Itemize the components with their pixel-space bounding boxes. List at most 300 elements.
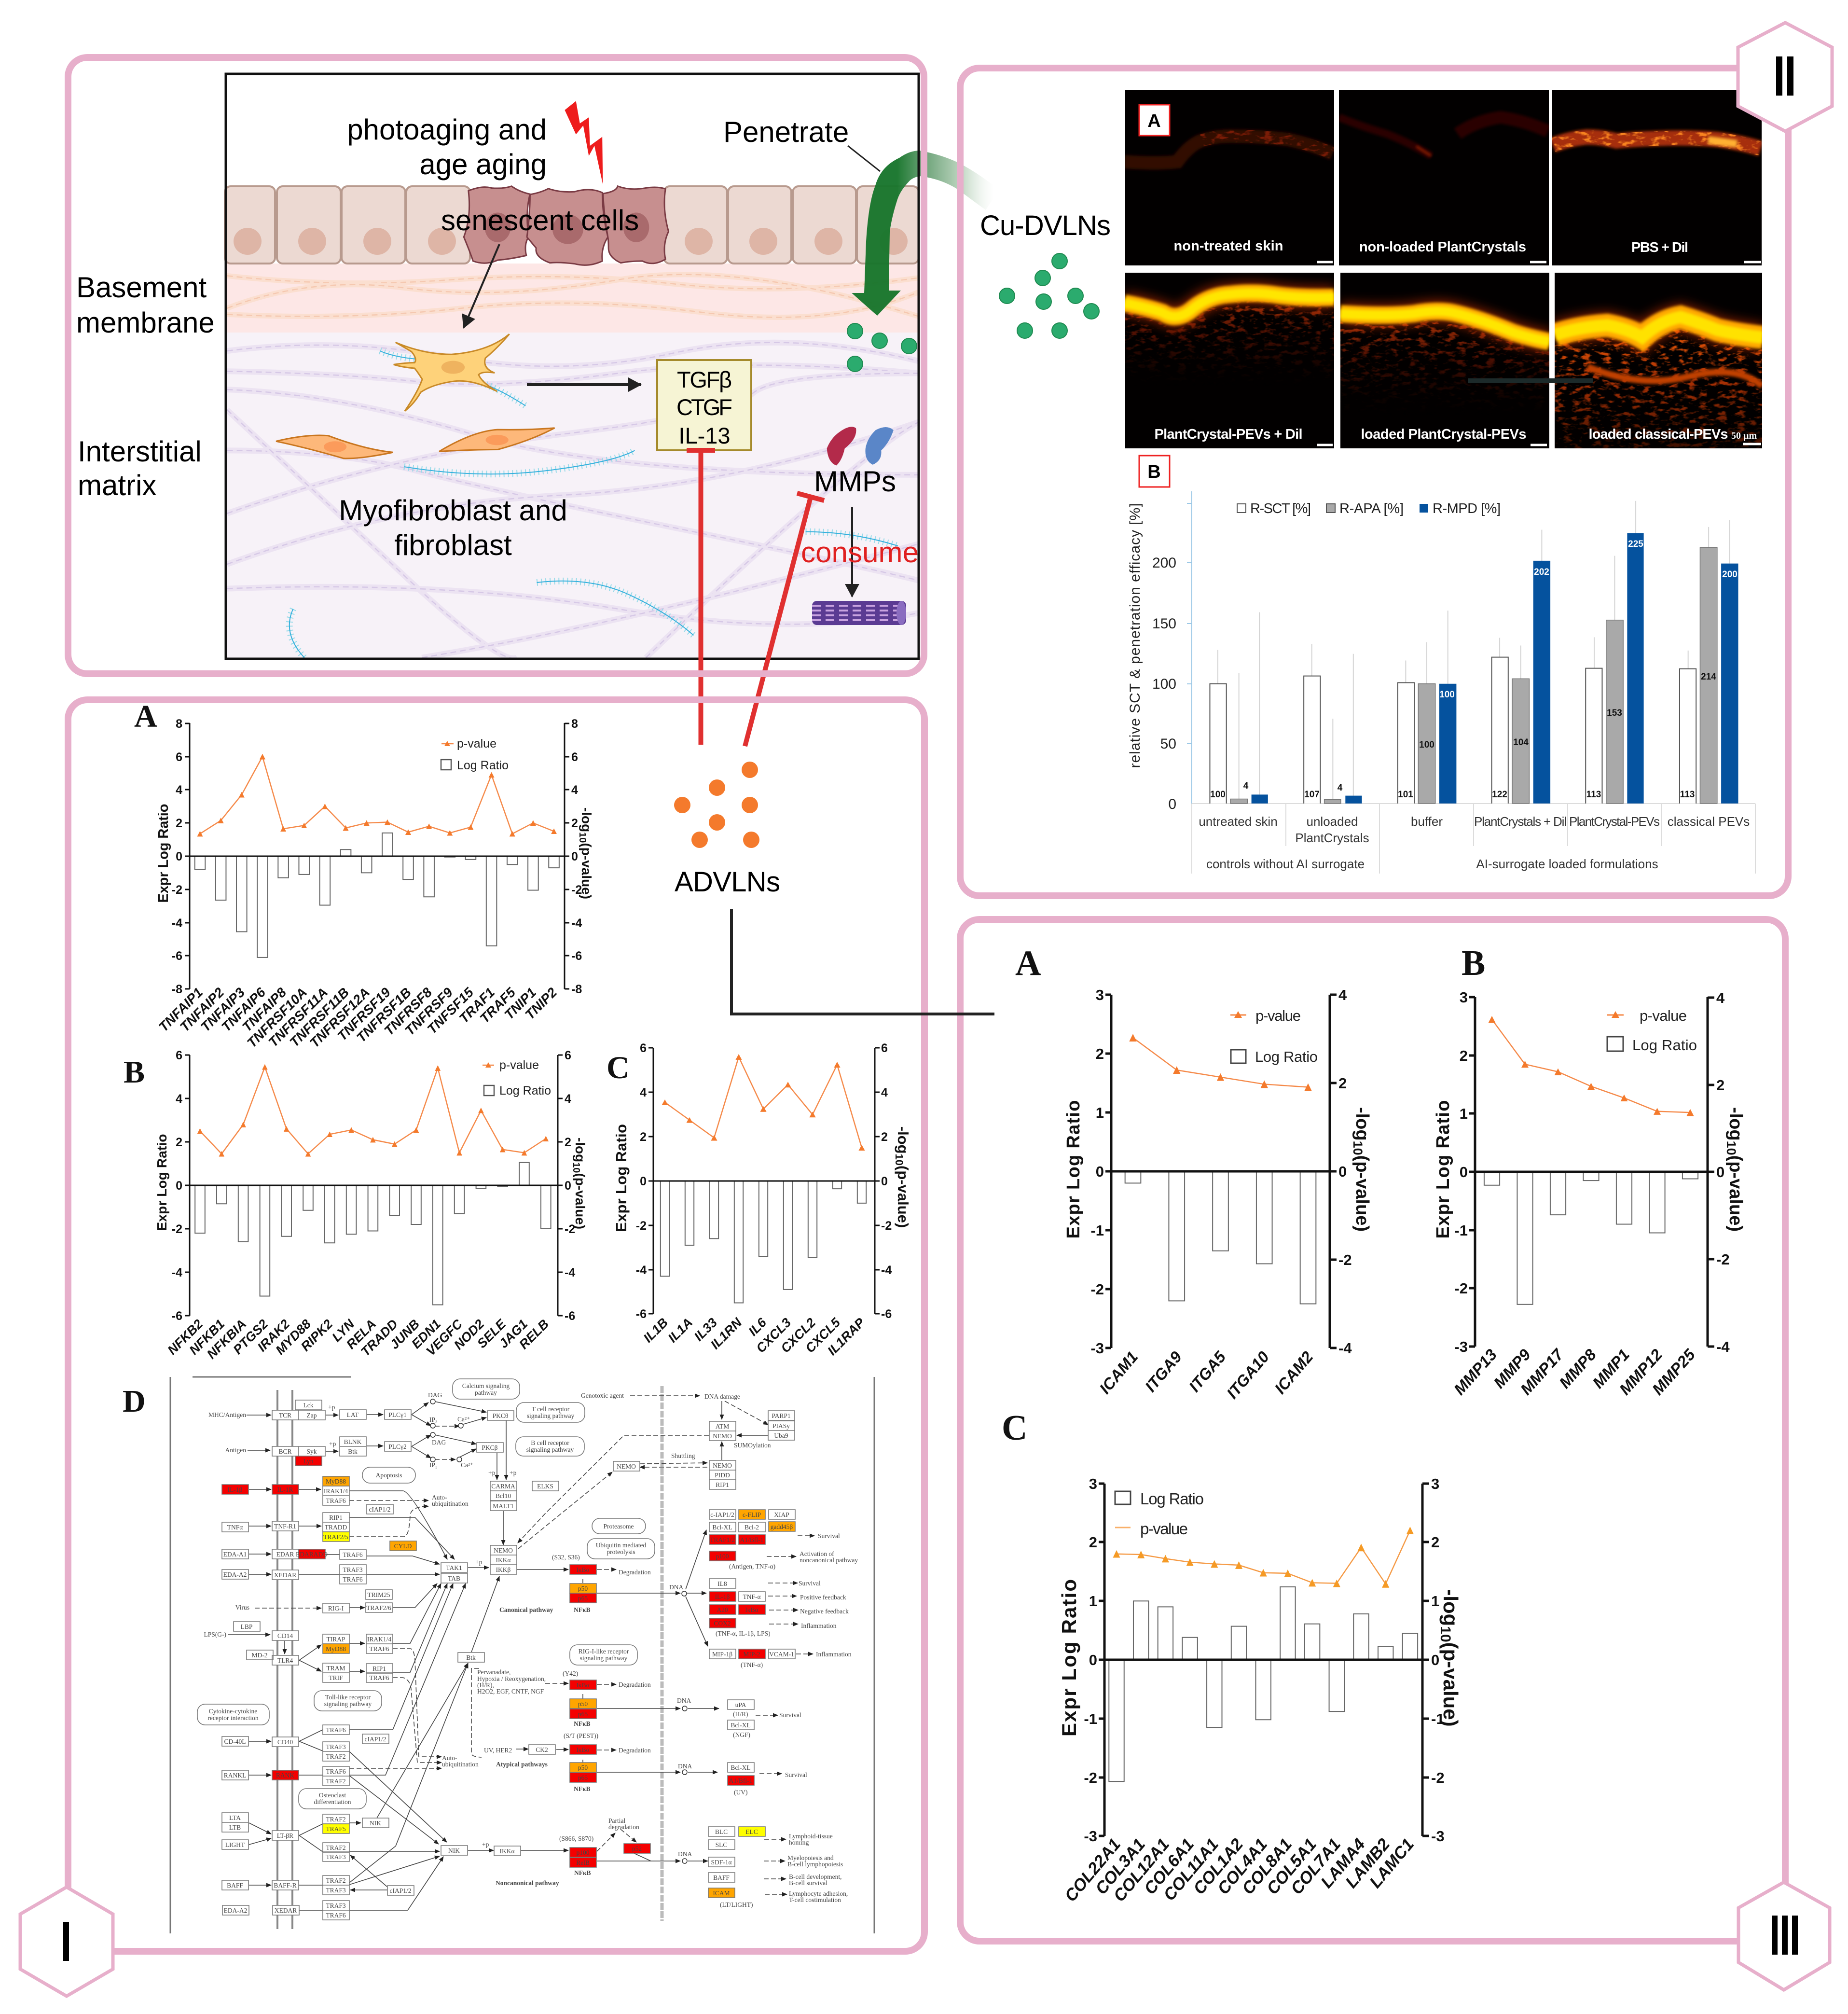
free annotations: (S866, S870) — [559, 1835, 593, 1842]
chart III-C: -log — [1439, 1589, 1462, 1626]
free annotations: Auto- — [432, 1494, 447, 1501]
box labels: TNF-α — [743, 1593, 761, 1600]
tick labels: -2 — [636, 1219, 647, 1233]
arrow: to cytokines — [527, 383, 641, 386]
box labels: TRAF6 — [343, 1551, 363, 1558]
box labels: SDF-1α — [711, 1859, 732, 1866]
bars — [1484, 1019, 1698, 1305]
tick labels: -2 — [571, 883, 582, 897]
legend — [483, 1058, 551, 1097]
box labels: Lyn — [303, 1458, 314, 1465]
box labels: PKCθ — [493, 1412, 508, 1419]
y tick labels — [1152, 555, 1176, 812]
grid — [1192, 804, 1755, 874]
box labels: p65 — [578, 1595, 588, 1602]
axis titles: Expr Log Ratio — [1063, 1100, 1084, 1238]
pathway rounded boxes: Ubiquitin mediated — [596, 1542, 647, 1549]
box labels: CD14 — [277, 1632, 293, 1639]
free annotations: Inflammation — [816, 1651, 852, 1658]
membrane lines — [277, 1390, 292, 1929]
free annotations: Atypical pathways — [496, 1761, 548, 1768]
gene labels: TNFAIP6 — [219, 985, 269, 1035]
tick labels: 0 — [1716, 1164, 1724, 1181]
box labels: p52 — [632, 1845, 642, 1852]
box labels: Syk — [306, 1448, 317, 1455]
free annotations: Lymphoid-tissue — [789, 1833, 833, 1840]
tick labels: 6 — [565, 1049, 571, 1062]
box labels: MIP-1β — [712, 1651, 732, 1658]
free annotations: (TNF-α) — [741, 1661, 763, 1668]
data labels: 100 — [1210, 790, 1226, 800]
free annotations: DAG — [432, 1439, 446, 1446]
tick labels: -4 — [1716, 1338, 1730, 1355]
box labels: cIAP1/2 — [369, 1506, 391, 1513]
box labels: IRAK1/4 — [324, 1487, 348, 1495]
box labels: p50 — [578, 1764, 588, 1771]
tick labels: 0 — [176, 850, 182, 863]
free annotations: Pervanadate, — [477, 1668, 510, 1676]
tick labels — [172, 1049, 575, 1323]
box: cytokines: TGFβ — [677, 367, 732, 392]
gene labels: MMP9 — [1490, 1345, 1534, 1392]
box labels: BAFF — [227, 1882, 243, 1889]
chart III-C — [1058, 1475, 1462, 1905]
tick labels: -4 — [571, 917, 582, 930]
free annotations: IP₃ — [429, 1461, 438, 1469]
tick labels: 2 — [1096, 1045, 1104, 1062]
Cu-DVLN nanoparticles — [999, 253, 1099, 338]
chart III-A: -log — [1352, 1107, 1372, 1141]
tick labels: 0 — [1338, 1163, 1347, 1180]
chart I-B: -log — [573, 1138, 588, 1162]
tick labels: -3 — [1084, 1828, 1097, 1845]
micrographs A — [1124, 90, 1763, 448]
tick labels: -1 — [1431, 1710, 1445, 1727]
tick labels: 3 — [1431, 1475, 1439, 1492]
free annotations: IP₃ — [429, 1416, 438, 1423]
free annotations: H2O2, EGF, CNTF, NGF — [477, 1688, 544, 1695]
epidermis cells — [225, 186, 919, 264]
tick labels: 2 — [176, 1136, 182, 1149]
box labels: PIASy — [772, 1422, 790, 1430]
box labels: XEDAR — [275, 1907, 297, 1914]
box labels: XIAP — [774, 1511, 789, 1518]
legend: Log Ratio — [1140, 1490, 1204, 1508]
box labels: TRAF1/2 — [710, 1536, 735, 1543]
tick labels: 0 — [1096, 1163, 1104, 1180]
free annotations: DNA — [678, 1763, 692, 1770]
tick labels: 2 — [640, 1130, 647, 1144]
free annotations: Survival — [785, 1771, 807, 1778]
free annotations: +p — [475, 1558, 483, 1566]
box labels: TRAF6 — [326, 1497, 346, 1504]
gene labels: NOD2 — [451, 1317, 487, 1352]
gene labels: RELA — [344, 1317, 379, 1352]
micrograph: PBS + Dil: PBS + Dil — [1631, 240, 1688, 255]
free annotations: NFκB — [574, 1606, 591, 1613]
box labels: TNF-R1 — [274, 1523, 296, 1530]
tick labels: 2 — [1460, 1047, 1468, 1064]
gene labels: IL1RAP — [825, 1315, 868, 1358]
category labels: PlantCrystal-PEVs — [1569, 814, 1660, 829]
bars — [195, 757, 559, 958]
tick labels: -6 — [881, 1307, 892, 1321]
free annotations: (S/T (PEST)) — [564, 1732, 598, 1739]
box labels: Btk — [348, 1448, 358, 1455]
pathway rounded boxes: B cell receptor — [531, 1439, 569, 1446]
box labels: MALT1 — [493, 1502, 514, 1510]
label A: A — [1147, 111, 1161, 131]
box labels: XEDAR — [274, 1571, 296, 1579]
box labels: TNFα — [227, 1524, 243, 1531]
free annotations: Shuttling — [671, 1452, 695, 1459]
pathway rounded boxes: receptor interaction — [207, 1714, 259, 1722]
box labels: CD-40L — [224, 1738, 246, 1745]
gene labels — [165, 1316, 552, 1361]
gene labels: MMP17 — [1517, 1345, 1567, 1398]
text: Cu-DVLNs: Cu-DVLNs — [980, 210, 1111, 241]
box labels: IKKα — [499, 1847, 515, 1855]
tick labels: -1 — [1084, 1710, 1097, 1727]
data labels: 4 — [1243, 781, 1249, 791]
gene labels: RIPK2 — [298, 1317, 335, 1354]
free annotations: Degradation — [619, 1681, 651, 1688]
box labels: BCR — [278, 1448, 292, 1455]
text: senescent cells: senescent cells — [441, 204, 639, 236]
box labels: CK2 — [536, 1746, 548, 1753]
gene labels: NFKBIA — [204, 1317, 249, 1361]
gene labels: TNFAIP2 — [177, 985, 227, 1035]
free annotations: DNA — [677, 1697, 691, 1704]
box labels: IL-1R — [277, 1486, 293, 1493]
tick labels: 1 — [1096, 1104, 1104, 1121]
box labels: LTB — [229, 1824, 241, 1831]
chart I-A: (p-value) — [579, 843, 594, 899]
gene labels: EDN1 — [409, 1317, 443, 1351]
tick labels: 4 — [565, 1092, 571, 1106]
side rules — [170, 1377, 874, 1933]
chart I-C — [613, 1042, 911, 1358]
box labels: RANKL — [224, 1772, 246, 1779]
gene labels: CXCL2 — [778, 1315, 818, 1356]
box labels: A1/Bfl-1 — [740, 1536, 763, 1543]
bars: R-MPD — [1252, 533, 1738, 804]
axis titles: Expr Log Ratio — [1433, 1100, 1453, 1238]
gene labels: JAG1 — [496, 1317, 530, 1351]
panel: skin pathology frame — [68, 57, 924, 674]
box labels: p50 — [578, 1700, 588, 1708]
gene labels: COL3A1 — [1091, 1835, 1149, 1898]
box labels: TRIM25 — [367, 1591, 390, 1598]
gene labels: JUNB — [387, 1317, 422, 1352]
legend: p-value — [457, 737, 496, 750]
box labels: p100 — [716, 1553, 729, 1560]
tick labels: 2 — [1338, 1075, 1347, 1092]
free annotations: Genotoxic agent — [581, 1392, 624, 1399]
gene labels — [641, 1315, 868, 1358]
tick labels: 0 — [881, 1175, 888, 1188]
ADVLN nanoparticles — [674, 762, 759, 848]
free annotations: NFκB — [574, 1720, 591, 1727]
box labels: c-FLIP — [743, 1511, 761, 1518]
tick labels: 0 — [176, 1179, 182, 1193]
axis titles: Expr Log Ratio — [156, 804, 171, 903]
tick labels: -4 — [636, 1264, 647, 1277]
box labels: TRAF6 — [326, 1912, 346, 1919]
chart III-A: (p-value) — [1352, 1155, 1372, 1232]
text: penetrate leader — [848, 146, 880, 171]
free annotations: (H/R), — [477, 1681, 494, 1689]
bars — [661, 1057, 866, 1303]
axis titles: Expr Log Ratio — [613, 1124, 630, 1232]
box labels: RIG-I — [328, 1605, 344, 1612]
chart III-B — [1433, 989, 1746, 1398]
gene labels: IRAK2 — [255, 1317, 292, 1355]
category labels: untreated skin — [1199, 814, 1278, 829]
box labels: Uba9 — [774, 1432, 788, 1439]
gene labels: IL1RN — [708, 1315, 745, 1352]
tick labels: 4 — [1338, 986, 1347, 1003]
free annotations — [204, 1391, 858, 1908]
tick labels — [1084, 1475, 1445, 1845]
axis titles: Expr Log Ratio — [1058, 1579, 1080, 1736]
legend: R-APA [%] — [1339, 501, 1404, 516]
free annotations: Canonical pathway — [499, 1606, 553, 1613]
tick labels: 0 — [571, 850, 578, 863]
gene labels: TNFRSF1B — [354, 985, 414, 1045]
schematic border — [226, 74, 919, 659]
data labels: 100 — [1419, 740, 1434, 750]
tick labels — [1090, 986, 1352, 1357]
box labels: p100 — [576, 1849, 590, 1856]
box labels: PLCγ2 — [388, 1443, 407, 1450]
legend: Log Ratio — [457, 759, 509, 772]
box labels: NIK — [448, 1847, 460, 1854]
free annotations: (H/R) — [733, 1710, 748, 1718]
tick labels — [636, 1042, 892, 1321]
gene labels — [1096, 1347, 1317, 1402]
interstitial matrix layer — [227, 333, 918, 657]
gene labels: IL1A — [665, 1315, 695, 1346]
tick labels: -4 — [1338, 1340, 1352, 1357]
gene labels: COL7A1 — [1287, 1835, 1344, 1898]
box: cytokines — [657, 360, 751, 450]
box labels: uPA — [735, 1701, 746, 1708]
label A — [1139, 105, 1170, 136]
box labels: NEMO — [713, 1432, 732, 1440]
text: penetrate: Penetrate — [723, 116, 849, 148]
tick labels: -2 — [172, 1222, 182, 1236]
box labels: CYLD — [394, 1542, 412, 1550]
box labels: p50 — [578, 1585, 588, 1592]
micrograph: non-loaded PlantCrystals: non-loaded PlantCrystals — [1359, 239, 1526, 255]
legend: p-value — [1640, 1007, 1687, 1024]
tick labels: -2 — [1084, 1769, 1097, 1786]
gene labels: SELE — [474, 1316, 509, 1351]
tick labels: 1 — [1089, 1593, 1097, 1610]
free annotations: +p — [488, 1469, 496, 1476]
legend: p-value — [499, 1058, 539, 1072]
free annotations: Ca²⁺ — [457, 1416, 470, 1423]
box labels: LAT — [347, 1411, 359, 1418]
category labels: AI-surrogate loaded formulations — [1476, 857, 1658, 871]
box labels: TRADD — [325, 1524, 347, 1531]
box labels: TRIF — [329, 1674, 343, 1681]
box labels: NEMO — [713, 1462, 732, 1469]
tick labels: 6 — [881, 1042, 888, 1055]
box labels: Zap — [307, 1412, 317, 1419]
free annotations: B-cell development, — [789, 1873, 841, 1880]
text: basement membrane: Basement — [76, 271, 207, 304]
box labels: IKKα — [496, 1556, 511, 1564]
tick labels: 1 — [1431, 1593, 1439, 1610]
axes — [185, 1055, 563, 1316]
icon: MMP enzymes — [827, 427, 894, 466]
tick labels: -3 — [1431, 1828, 1445, 1845]
tick labels: 0 — [1089, 1652, 1097, 1668]
gene labels: TNFAIP1 — [156, 985, 206, 1035]
gene labels: ITGA9 — [1142, 1347, 1186, 1395]
tick labels: -6 — [636, 1307, 647, 1321]
free annotations: Inflammation — [801, 1622, 837, 1629]
tick labels: 2 — [1089, 1534, 1097, 1551]
text: consume: consume — [801, 536, 919, 569]
legend — [1237, 501, 1501, 516]
box labels: TRAF3 — [326, 1743, 346, 1750]
myofibroblast and fibroblasts — [276, 334, 554, 458]
data labels: 101 — [1398, 790, 1413, 800]
gene labels: LYN — [329, 1317, 358, 1345]
box labels: BLC — [715, 1828, 728, 1835]
box labels: TCR — [279, 1412, 291, 1419]
gene labels: IL1B — [641, 1315, 671, 1346]
free annotations: Myelopoiesis and — [787, 1854, 834, 1861]
gene labels: MMP1 — [1589, 1346, 1633, 1392]
panel II chart B — [1127, 456, 1755, 874]
y tick labels: 100 — [1152, 676, 1176, 692]
pathway rounded boxes: Toll-like receptor — [325, 1694, 371, 1701]
data labels: 214 — [1701, 672, 1716, 682]
gene labels: TNFRSF12A — [307, 985, 372, 1051]
small junction circles — [430, 1399, 687, 1863]
gene labels: NFKB1 — [186, 1317, 227, 1358]
box labels: PLCγ1 — [388, 1411, 407, 1418]
label B — [1139, 456, 1170, 487]
panel: skin schematic — [225, 74, 919, 659]
free annotations: +p — [510, 1469, 517, 1476]
gene labels: PTGS2 — [230, 1317, 271, 1357]
bars — [195, 1067, 551, 1305]
gene labels: TRADD — [358, 1317, 400, 1359]
text: photoaging: photoaging and — [347, 113, 547, 146]
tick labels: -6 — [172, 949, 182, 963]
legend — [1115, 1490, 1204, 1538]
axes — [1105, 995, 1337, 1348]
tick labels: 8 — [176, 717, 182, 731]
label III-C: C — [1002, 1408, 1027, 1448]
box labels: TAB — [448, 1575, 460, 1582]
tick labels: -4 — [172, 1266, 182, 1279]
gene labels: LAMB2 — [1342, 1835, 1393, 1891]
pathway rounded boxes: signaling pathway — [527, 1412, 575, 1419]
box labels: NEMO — [617, 1463, 636, 1470]
legend — [1230, 1007, 1318, 1065]
box labels: LTA — [229, 1814, 241, 1821]
error bars — [1218, 501, 1730, 800]
free annotations: (S32, S36) — [552, 1554, 580, 1561]
tick labels: 3 — [1089, 1475, 1097, 1492]
bars — [1109, 1530, 1418, 1781]
box labels: RANK — [276, 1772, 294, 1779]
box labels: ELC — [745, 1828, 758, 1835]
box labels: IRAK1/4 — [367, 1636, 391, 1643]
y tick labels: 150 — [1152, 616, 1176, 632]
gene labels: MMP13 — [1450, 1346, 1500, 1398]
basement membrane layer — [227, 264, 918, 333]
free annotations: B-cell survival — [789, 1879, 827, 1887]
gene labels: COL5A1 — [1263, 1835, 1320, 1898]
free annotations: Antigen — [225, 1446, 246, 1454]
data labels: 153 — [1607, 708, 1622, 718]
tick labels: 8 — [571, 717, 578, 731]
chart I-B — [154, 1049, 588, 1361]
box labels: TRAF6 — [326, 1768, 346, 1775]
box labels: LIGHT — [225, 1841, 245, 1848]
box labels: TRAF2 — [326, 1753, 346, 1760]
box labels: PARP1 — [772, 1412, 791, 1419]
tick labels: 6 — [176, 750, 182, 764]
box labels: cIAP1/2 — [365, 1736, 386, 1743]
axes — [1099, 1484, 1429, 1836]
panel: transcriptomics frame — [68, 700, 924, 1951]
data labels: 100 — [1439, 690, 1455, 700]
tick labels: -3 — [1454, 1338, 1468, 1355]
tick labels: 4 — [176, 1092, 182, 1106]
data labels: 202 — [1534, 567, 1549, 577]
category labels: PlantCrystals — [1295, 831, 1369, 845]
y tick labels: 200 — [1152, 555, 1176, 571]
free annotations: (NGF) — [733, 1731, 750, 1738]
free annotations: Survival — [818, 1532, 840, 1540]
micrograph: non-treated skin — [1125, 90, 1334, 265]
bars: R-SCT — [1210, 657, 1696, 804]
tick labels: 2 — [881, 1130, 888, 1144]
box labels: EDA-A2 — [223, 1571, 247, 1578]
box labels: TRAF6 — [369, 1645, 389, 1653]
tick labels: -4 — [565, 1266, 575, 1279]
micrograph: PBS + Dil — [1552, 90, 1762, 265]
label I-B: B — [124, 1055, 145, 1090]
box labels: IκBα — [576, 1746, 590, 1753]
icon: collagen cylinder — [812, 601, 906, 625]
box labels: TRAF3 — [326, 1902, 346, 1909]
tick labels: -6 — [565, 1309, 575, 1323]
box labels: MyD88 — [326, 1478, 346, 1485]
free annotations: T-cell costimulation — [789, 1896, 841, 1903]
free annotations: Virus — [235, 1604, 249, 1611]
free annotations: Degradation — [619, 1747, 651, 1754]
chart III-B: -log — [1725, 1107, 1746, 1141]
micrograph: PlantCrystal-PEVs + Dil: PlantCrystal-PEVs + Dil — [1154, 427, 1303, 442]
tick labels: -8 — [172, 983, 182, 996]
box labels: TRAF3 — [326, 1853, 346, 1861]
free annotations: (Antigen, TNF-α) — [729, 1563, 775, 1570]
chart III-A: 10 — [1351, 1141, 1365, 1155]
gene labels: ITGA10 — [1223, 1347, 1273, 1402]
box labels: BAFF — [713, 1874, 730, 1881]
pathway rounded boxes: signaling pathway — [526, 1446, 574, 1453]
category labels: buffer — [1411, 814, 1443, 829]
